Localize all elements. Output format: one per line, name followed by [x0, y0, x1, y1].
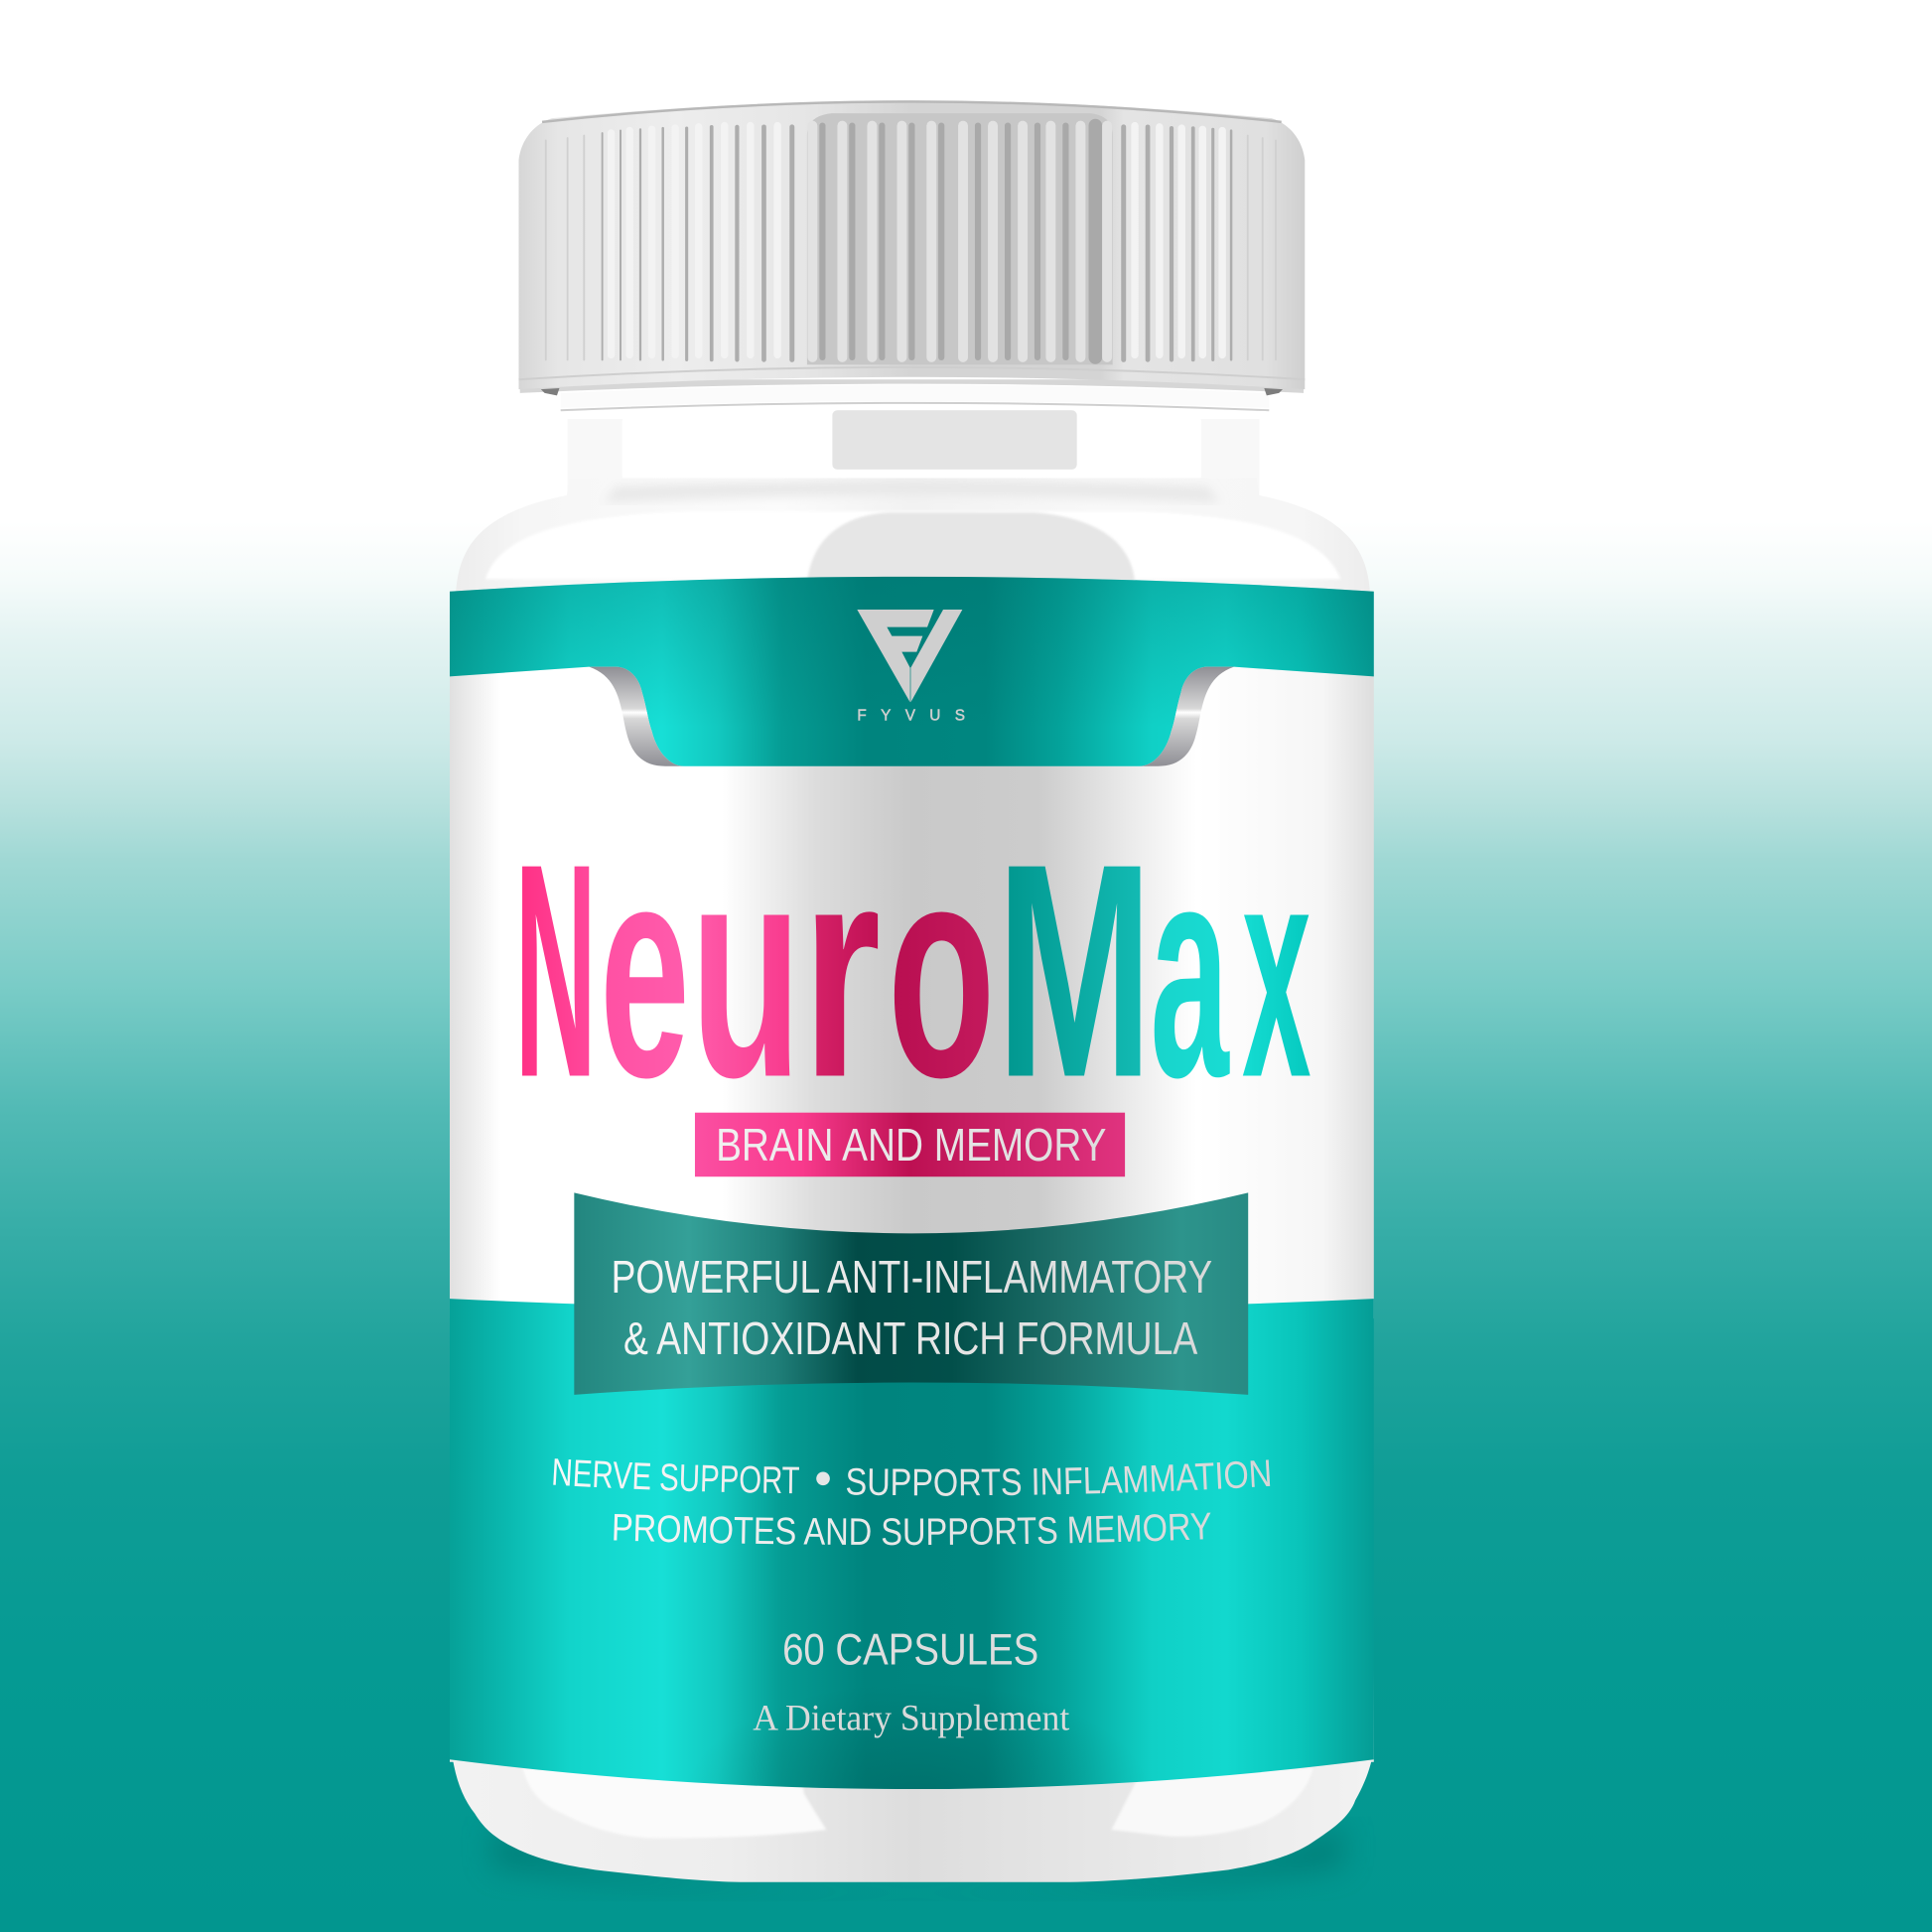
formula banner [574, 1192, 1248, 1395]
product name: NeuroMax: x [1242, 800, 1311, 1141]
product name: NeuroMax: o [888, 801, 996, 1142]
capsule count: 60 CAPSULES [782, 1626, 1038, 1675]
benefits text: SUPPORTS INFLAMMATION [847, 1459, 1271, 1496]
product name: NeuroMax: u [690, 800, 801, 1141]
logo: FYVUS [857, 610, 965, 725]
bottle shadow [492, 1824, 1343, 1894]
label white paper [450, 665, 1374, 1318]
product name: NeuroMax: a [1151, 800, 1230, 1141]
cap body [518, 101, 1305, 389]
formula banner: POWERFUL ANTI-INFLAMMATORY [612, 1251, 1212, 1303]
cap [518, 101, 1305, 410]
product name: NeuroMax: e [600, 801, 690, 1142]
formula banner: & ANTIOXIDANT RICH FORMULA [623, 1312, 1198, 1364]
bottle neck [568, 410, 1259, 499]
benefits text: PROMOTES AND SUPPORTS MEMORY [614, 1513, 1211, 1545]
silver fold left [589, 667, 683, 766]
logo: FYVUS: FYVUS [857, 708, 965, 725]
lip notch left [541, 388, 559, 395]
cap lip [520, 379, 1304, 393]
product name: NeuroMax: M [997, 799, 1153, 1140]
benefits text: NERVE SUPPORT [553, 1458, 799, 1493]
shoulder highlight [485, 511, 1340, 579]
bottle shoulder and body [450, 479, 1374, 1762]
bottle base [452, 1756, 1373, 1882]
subtitle badge: brain and memory [695, 1113, 1125, 1176]
silver fold right [1140, 667, 1234, 766]
lower band bottom shading [746, 1728, 1088, 1789]
shoulder grey reflection [807, 512, 1135, 582]
subtitle badge: brain and memory: BRAIN AND MEMORY [716, 1119, 1106, 1171]
cap ridges [546, 126, 1276, 359]
cap top rim line [542, 101, 1282, 122]
lip notch right [1264, 388, 1283, 395]
top band shading [450, 577, 1374, 691]
bottle [450, 410, 1374, 1894]
label top teal band with tab [450, 577, 1374, 766]
product name: NeuroMax: N [514, 802, 597, 1142]
cap dark center patch [807, 113, 1113, 364]
benefits text [553, 1458, 1271, 1545]
product name: NeuroMax: r [802, 802, 881, 1141]
clear band under cap [561, 385, 1269, 408]
shoulder band shading [604, 481, 1220, 502]
dietary supplement line: A Dietary Supplement [753, 1698, 1070, 1738]
product name: NeuroMax [514, 799, 1311, 1142]
cap lower band rule [518, 367, 1305, 379]
clear band rule [561, 403, 1269, 410]
lower teal band [450, 1299, 1374, 1789]
